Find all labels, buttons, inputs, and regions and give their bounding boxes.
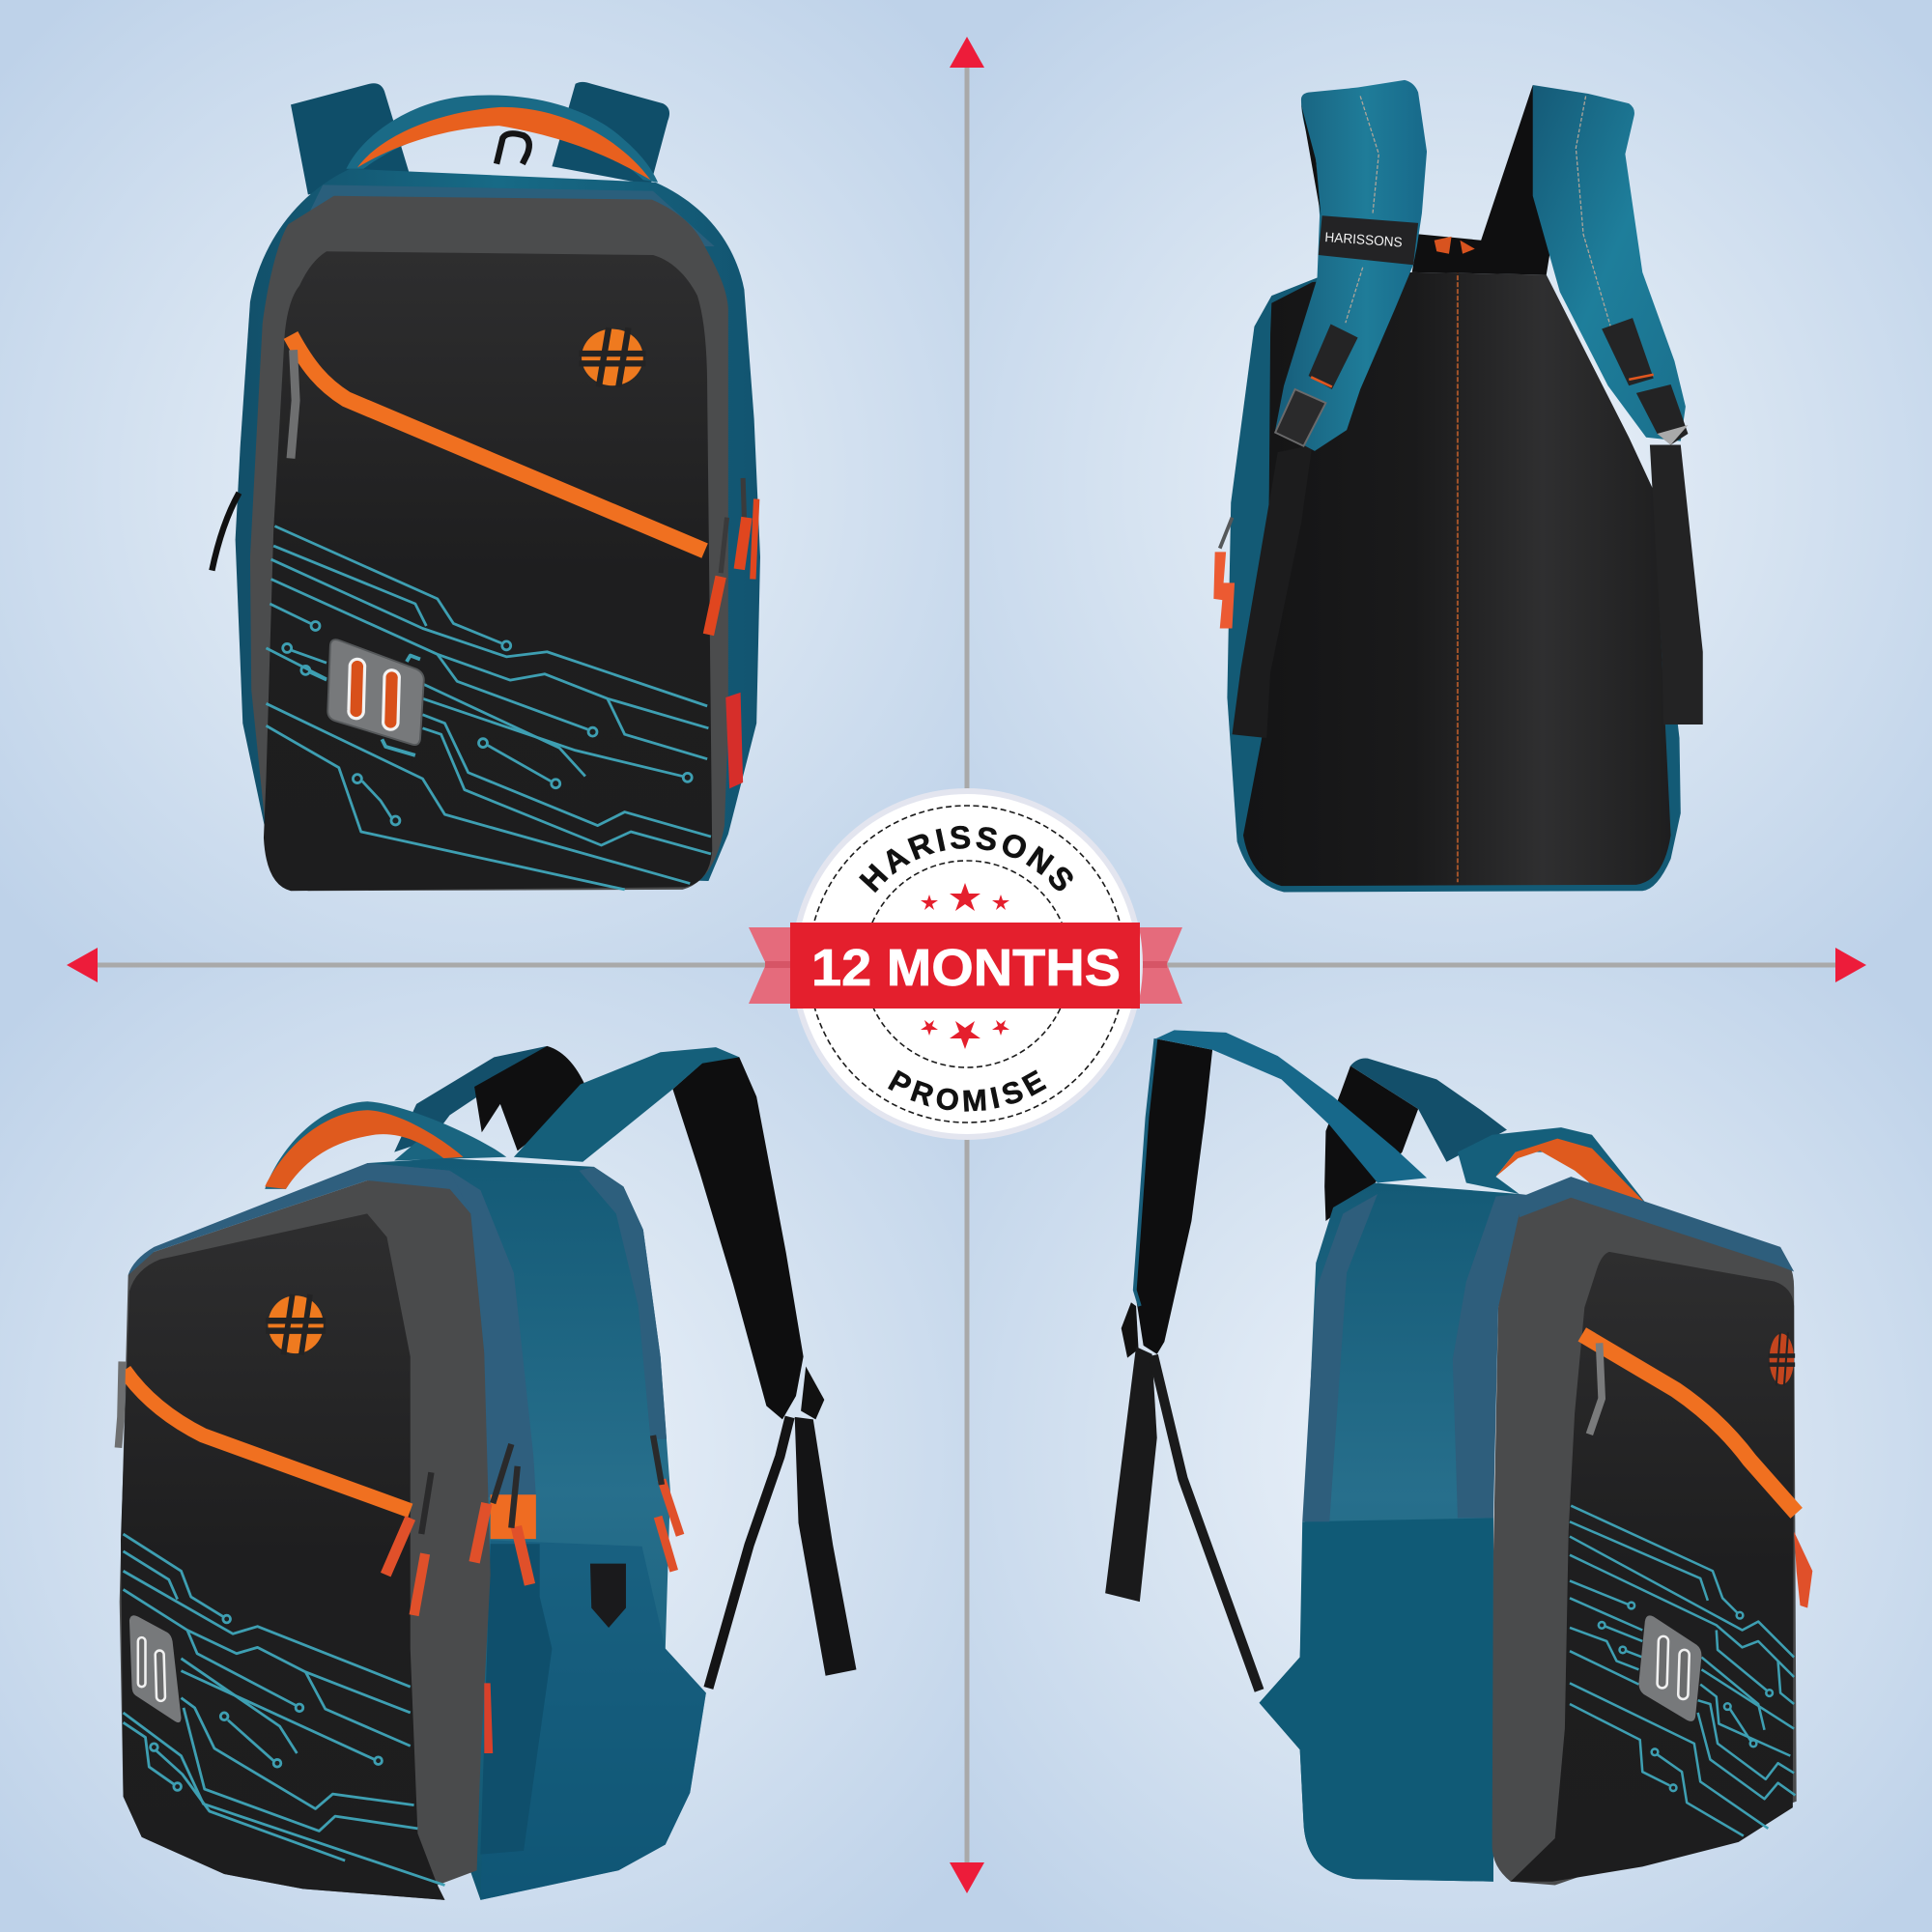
right shoulder strap (1533, 85, 1686, 441)
black panel (121, 1213, 444, 1900)
zipper heads (421, 1435, 662, 1534)
logo (579, 327, 645, 387)
right webbing (1650, 444, 1703, 724)
left shoulder strap (1275, 80, 1427, 451)
side badge (590, 1564, 626, 1628)
patch (491, 1494, 536, 1539)
front strap teal (1155, 1030, 1427, 1182)
left adjuster (1275, 324, 1358, 446)
grey frame (1492, 1189, 1797, 1886)
top stars (921, 883, 1009, 911)
dashed rings (809, 806, 1125, 1122)
grey frame (120, 1180, 491, 1900)
lower side panel (1260, 1518, 1493, 1882)
orange zipper (125, 1370, 411, 1511)
chip patch (1638, 1615, 1701, 1721)
side panel (1260, 1182, 1520, 1882)
shoulder straps (291, 82, 669, 195)
side tag (484, 1683, 493, 1753)
right puller (1794, 1531, 1812, 1608)
zipper chain (1220, 518, 1233, 549)
zipper band rear (1302, 1194, 1378, 1521)
badge disc (791, 788, 1143, 1140)
top band (296, 185, 715, 246)
right adjuster (1602, 318, 1688, 444)
rear strap (394, 1046, 589, 1152)
strap label (1319, 215, 1418, 265)
body (1227, 277, 1681, 892)
12 MONTHS: 12 MONTHS (811, 939, 1121, 997)
right pullers (708, 478, 756, 635)
zipper band front (367, 1163, 536, 1497)
black inner V (1412, 85, 1555, 274)
left puller (291, 350, 296, 458)
chip patch (129, 1615, 181, 1722)
top handle (346, 95, 658, 183)
badge: HARISSONS (859, 825, 1073, 893)
webbing (708, 1367, 856, 1688)
centre stitch (1457, 269, 1459, 882)
left loop (212, 493, 239, 571)
strap pad (1135, 1038, 1212, 1354)
zipper band front (1453, 1194, 1540, 1518)
handle (265, 1101, 506, 1189)
ribbon tails (749, 927, 1182, 1004)
handle (1458, 1127, 1647, 1205)
backpack: left three-quarter view (118, 1046, 856, 1900)
backpack: front view (212, 82, 760, 891)
front strap teal (514, 1047, 739, 1162)
strap label: HARISSONS (1324, 229, 1403, 250)
orange pullers (1213, 552, 1235, 629)
top blue band (1520, 1177, 1794, 1271)
PROMISE arc text (820, 964, 1114, 1111)
orange zipper (291, 335, 705, 551)
black panel (264, 251, 712, 891)
HARISSONS arc text (851, 848, 1083, 964)
orange mesh (1435, 237, 1475, 254)
front strap pad (672, 1051, 804, 1419)
black panel (1511, 1252, 1794, 1882)
chip patch (327, 639, 424, 745)
zipper band rear (579, 1167, 667, 1439)
rear strap (1324, 1059, 1507, 1221)
grey puller (1589, 1343, 1602, 1435)
grey frame (250, 196, 728, 891)
logo (1769, 1332, 1795, 1385)
pocket (480, 1540, 706, 1900)
logo (266, 1294, 326, 1354)
badge: PROMISE (888, 1069, 1047, 1112)
circuit pattern (1570, 1506, 1795, 1836)
backpack: right three-quarter view (1105, 1030, 1812, 1886)
circuit pattern (124, 1534, 444, 1886)
back panel (1243, 272, 1671, 886)
body side teal (236, 169, 760, 881)
circuit pattern (267, 526, 711, 890)
bottom stars (921, 1020, 1009, 1049)
side tag (725, 693, 743, 788)
left webbing (1233, 444, 1312, 738)
ribbon band (790, 923, 1140, 1009)
backpack: back view (1213, 80, 1703, 892)
webbing (1105, 1302, 1260, 1690)
side panel (367, 1158, 706, 1900)
orange zipper (1582, 1334, 1797, 1513)
left puller (118, 1361, 122, 1448)
badge (749, 788, 1182, 1140)
pullers (385, 1480, 680, 1615)
top blue band (128, 1163, 470, 1275)
